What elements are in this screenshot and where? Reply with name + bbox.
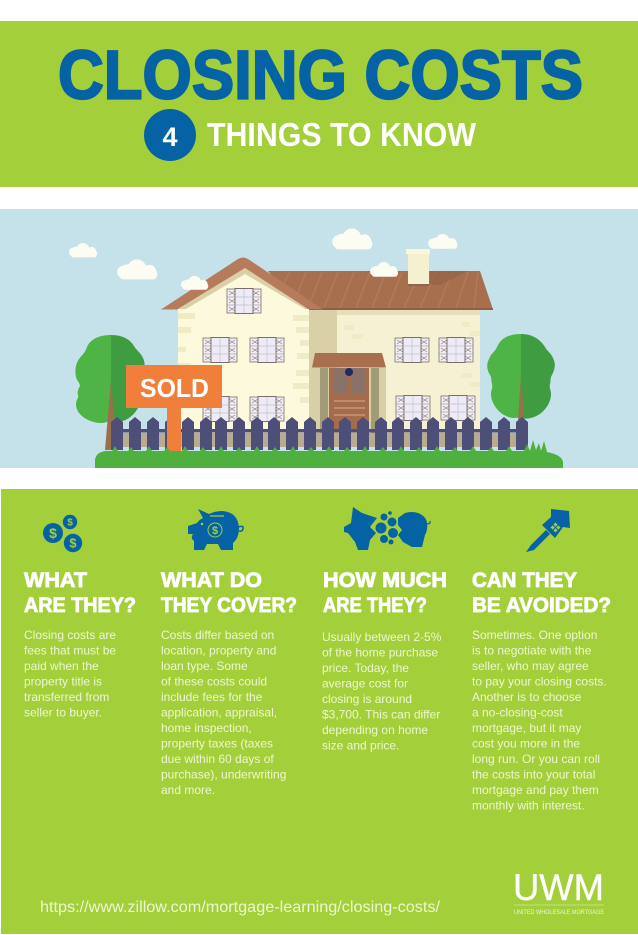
text block: of the home purchase [322,646,438,660]
panel: four questions [1,489,638,934]
heading: THEY COVER? [161,594,297,617]
text block: of these costs could [161,674,267,688]
text block: include fees for the [161,690,263,704]
text block: Usually between 2-5% [322,630,442,644]
logo: UWM: UNITED WHOLESALE MORTGAGE [514,910,604,916]
text block: due within 60 days of [161,752,274,766]
chimney [406,249,430,286]
heading: ARE THEY? [24,594,136,617]
text block: long run. Or you can roll [472,752,600,766]
house [161,249,493,434]
icon: house key [526,509,570,552]
text block: location, property and [161,644,276,658]
text block: to pay your closing costs. [472,674,607,688]
text block: and more. [161,783,215,797]
sold sign: SOLD [140,373,209,403]
subtitle: THINGS TO KNOW [207,116,477,153]
heading: ARE THEY? [323,594,427,617]
heading: WHAT [24,569,87,592]
clouds [69,228,457,290]
windows [203,288,475,422]
text block: seller, who may agree [472,659,589,673]
column: what do they cover [161,509,297,797]
tree: left [75,335,145,450]
panel: house illustration [0,209,638,468]
text block: price. Today, the [322,661,409,675]
number badge: 4 [162,122,178,152]
text block: average cost for [322,676,408,690]
text block: size and price. [322,738,399,752]
text block: closing is around [322,692,412,706]
fence [111,417,528,450]
text block: mortgage and pay them [472,783,599,797]
porch and door [312,353,386,434]
text block: Sometimes. One option [472,628,597,642]
heading: BE AVOIDED? [472,594,611,617]
text block: purchase), underwriting [161,768,286,782]
text block: is to negotiate with the [472,644,592,658]
tree: right [487,334,555,420]
text block: home inspection, [161,721,252,735]
sold sign [126,365,222,451]
column: can they be avoided [472,509,611,812]
text block: property title is [24,674,102,688]
icon: broken piggy bank [344,507,430,550]
text block: depending on home [322,723,428,737]
text block: a no-closing-cost [472,706,563,720]
text block: transferred from [24,690,109,704]
text block: Another is to choose [472,690,582,704]
text block: Costs differ based on [161,628,274,642]
text block: mortgage, but it may [472,721,581,735]
number badge [144,109,196,161]
logo: UWM: UWM [513,867,604,908]
gable roof [161,258,323,310]
heading: WHAT DO [161,569,262,592]
text block: property taxes (taxes [161,736,273,750]
source url: https://www.zillow.com/mortgage-learning/closing-costs/ [40,899,441,916]
icon: coins [43,515,82,552]
text block: Closing costs are [24,628,116,642]
text block: the costs into your total [472,768,595,782]
header panel [0,21,638,187]
grass [95,440,563,468]
title: CLOSING COSTS [58,36,583,114]
column: what are they [24,515,136,720]
column: how much are they [322,507,447,752]
text block: fees that must be [24,644,116,658]
text block: cost you more in the [472,736,580,750]
text block: $3,700. This can differ [322,708,440,722]
text block: application, appraisal, [161,706,277,720]
text block: paid when the [24,659,99,673]
main wall [309,309,480,434]
text block: monthly with interest. [472,798,585,812]
icon: piggy bank: $ [212,525,218,537]
heading: CAN THEY [472,569,577,592]
main roof [268,271,493,310]
gable wall [178,268,309,434]
text block: seller to buyer. [24,706,102,720]
heading: HOW MUCH [323,569,447,592]
icon: piggy bank [188,509,243,550]
text block: loan type. Some [161,659,248,673]
